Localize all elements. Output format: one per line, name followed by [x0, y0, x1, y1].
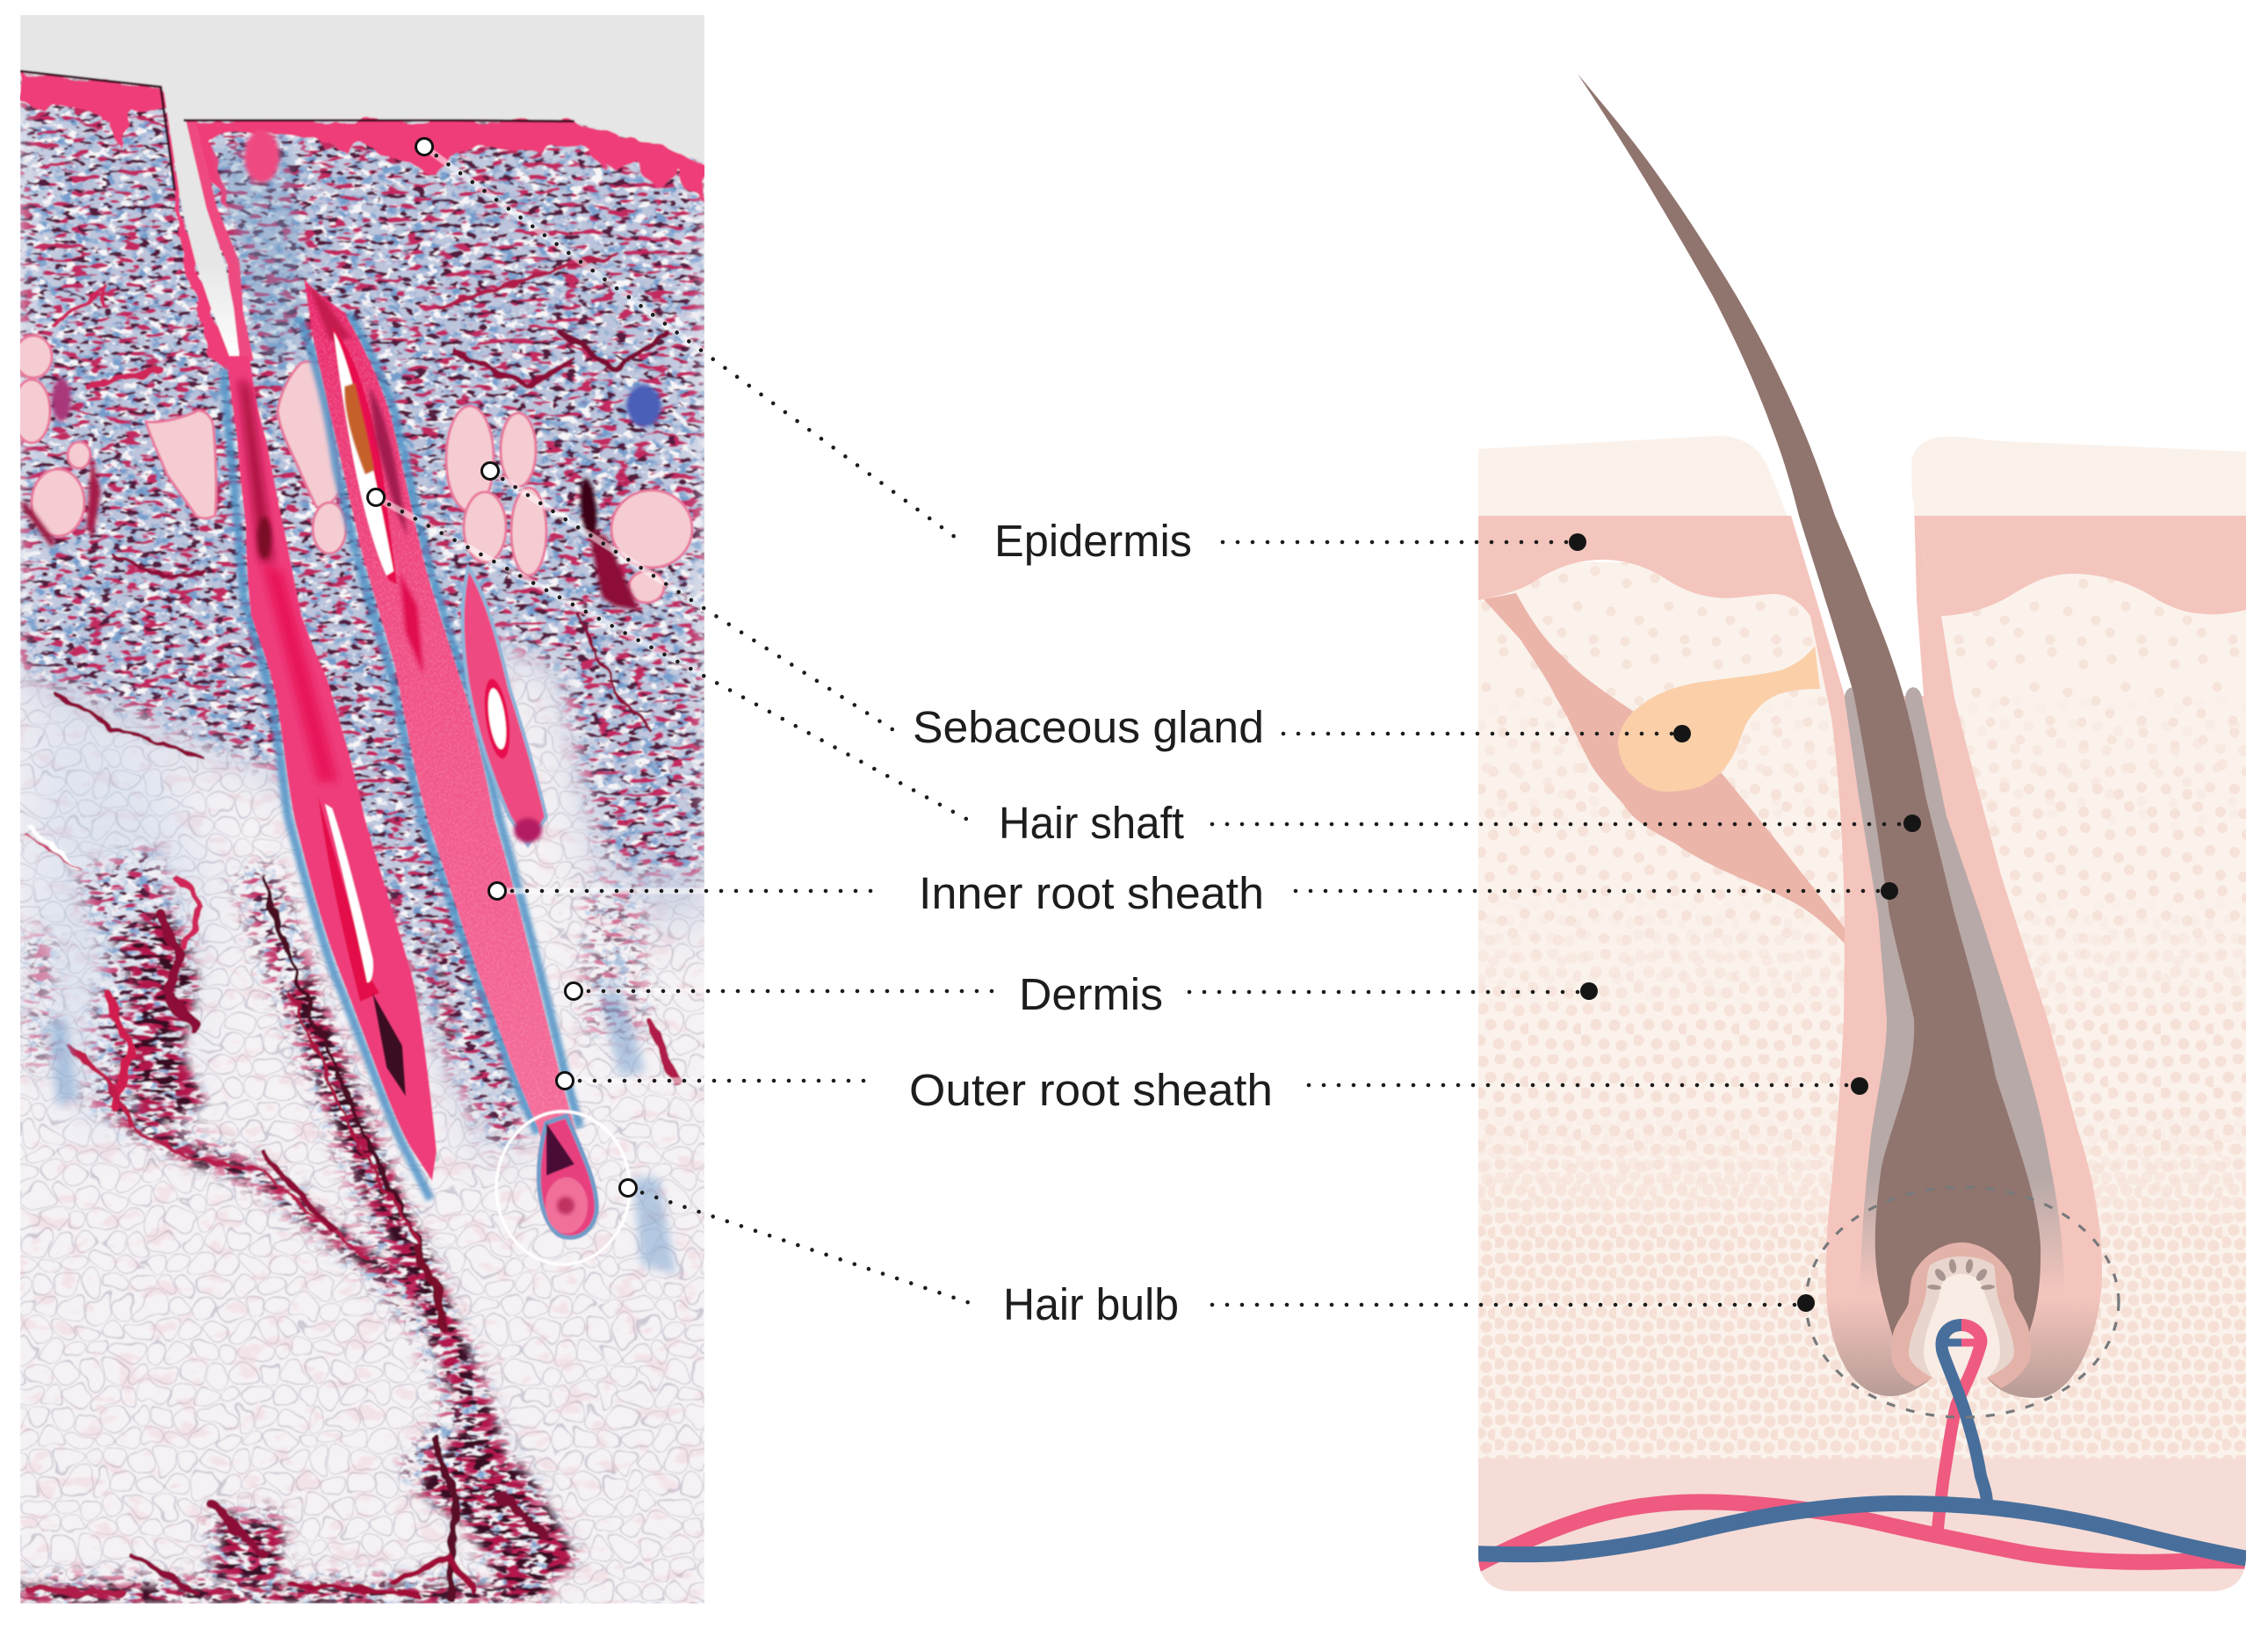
matrix inner ring: [1909, 1256, 2014, 1378]
hair canal rim: [190, 122, 248, 362]
upper dermis base colour: [20, 53, 704, 1195]
epidermis right: [1913, 516, 2246, 616]
sebaceous lobules: [13, 336, 692, 603]
vein riser: [1941, 1325, 1987, 1504]
label: Outer root sheath: Outer root sheath: [909, 1065, 1273, 1115]
hair bulb in photo: [538, 1116, 596, 1238]
marker: sebaceous gland: [481, 462, 499, 480]
marker: hair shaft: [1903, 814, 1921, 832]
panel: hair follicle illustration: [1471, 74, 2253, 1591]
marker: hair bulb: [1797, 1294, 1815, 1312]
stratum corneum left: [1478, 436, 1792, 527]
melanocyte ellipses: [1927, 1259, 1995, 1290]
leader lines: [376, 147, 1912, 1307]
leader: inner root sheath photo: [497, 889, 882, 893]
label: Inner root sheath: Inner root sheath: [919, 868, 1264, 918]
label: Hair bulb: Hair bulb: [1003, 1279, 1179, 1329]
follicle A: [227, 356, 437, 1181]
marker: dermis: [1580, 982, 1598, 1000]
label: Sebaceous gland: Sebaceous gland: [913, 702, 1264, 752]
hair canal: [1787, 501, 1924, 696]
label: Epidermis: Epidermis: [994, 516, 1192, 566]
leader: hair shaft illustration: [1212, 822, 1912, 826]
leader: epidermis photo: [424, 147, 962, 542]
marker: epidermis: [416, 139, 432, 155]
dermal papilla: [1924, 1274, 2000, 1378]
marker: outer root sheath: [1851, 1077, 1868, 1095]
marker: dermis: [566, 982, 581, 1000]
infundibulum blue connective tissue: [215, 145, 303, 365]
deep tissue blue streaks: [48, 982, 676, 1274]
leader: sebaceous photo: [490, 471, 898, 733]
subcutis band: [1478, 1459, 2246, 1591]
follicle C: [463, 568, 546, 845]
leader: hair bulb photo: [628, 1188, 980, 1307]
photo anchor markers: [367, 139, 636, 1197]
epidermis right segment: [184, 121, 704, 211]
collagen fibre bundles: [25, 255, 676, 1599]
photo tissue base: [20, 15, 704, 1604]
white highlight circle: [496, 1111, 630, 1264]
leader: inner root sheath illustration: [1296, 889, 1889, 893]
marker: sebaceous gland: [1673, 725, 1691, 742]
follicle blue sheaths: [223, 313, 580, 1199]
sebaceous gland: [1618, 646, 1820, 792]
artery riser: [1938, 1325, 1981, 1529]
dermis texture: [20, 53, 704, 1604]
outer root sheath: [1791, 516, 2102, 1398]
faint blue wisps in lower dermis: [26, 703, 211, 1142]
label: Dermis: Dermis: [1019, 969, 1163, 1019]
artery main: [1471, 1502, 2253, 1567]
dermis background: [1478, 562, 2246, 1467]
leader: hair bulb illustration: [1212, 1303, 1806, 1307]
illustration anchor markers: [1569, 533, 1921, 1312]
marker: inner root sheath: [488, 882, 506, 900]
leader: epidermis illustration: [1223, 540, 1578, 544]
arrector pili muscle: [1484, 593, 1845, 944]
sky above skin surface: [20, 15, 704, 162]
leader: sebaceous illustration: [1283, 732, 1682, 735]
marker: epidermis: [1569, 533, 1586, 551]
skin surface line: [20, 71, 574, 191]
loop crossbar: [1944, 1339, 1978, 1346]
labels: [909, 516, 1273, 1329]
dense collagen band texture: [20, 906, 584, 1604]
label: Hair shaft: Hair shaft: [999, 798, 1184, 848]
marker: hair shaft: [367, 489, 385, 506]
hair canal: [163, 88, 240, 360]
leader halos inside photo: [376, 147, 1001, 1081]
marker: outer root sheath: [557, 1072, 573, 1090]
vein main: [1471, 1503, 2253, 1560]
leader: outer root sheath photo: [565, 1079, 868, 1082]
hair shaft: [1578, 74, 2040, 1337]
epidermis left: [1478, 516, 1817, 616]
hair bulb dashed outline: [1806, 1187, 2119, 1417]
matrix outer ring: [1891, 1242, 2031, 1388]
follicle B: [299, 272, 597, 1195]
adipose mesh lower tissue: [20, 615, 704, 1604]
follicle ostium pink plug: [244, 130, 279, 183]
epidermis left segment: [20, 73, 235, 371]
inner root sheath left: [1845, 687, 1932, 1293]
panel: histology photograph: [20, 15, 704, 1604]
marker: hair bulb: [620, 1179, 636, 1197]
leader: outer root sheath illustration: [1309, 1083, 1860, 1087]
leader: dermis photo: [574, 989, 1001, 993]
inner root sheath right: [1897, 687, 2064, 1293]
dark pigmented ducts: [23, 378, 661, 611]
leader: hair shaft photo: [376, 497, 976, 824]
stratum corneum right: [1911, 437, 2246, 527]
marker: inner root sheath: [1881, 882, 1898, 900]
leader: dermis illustration: [1189, 990, 1589, 994]
